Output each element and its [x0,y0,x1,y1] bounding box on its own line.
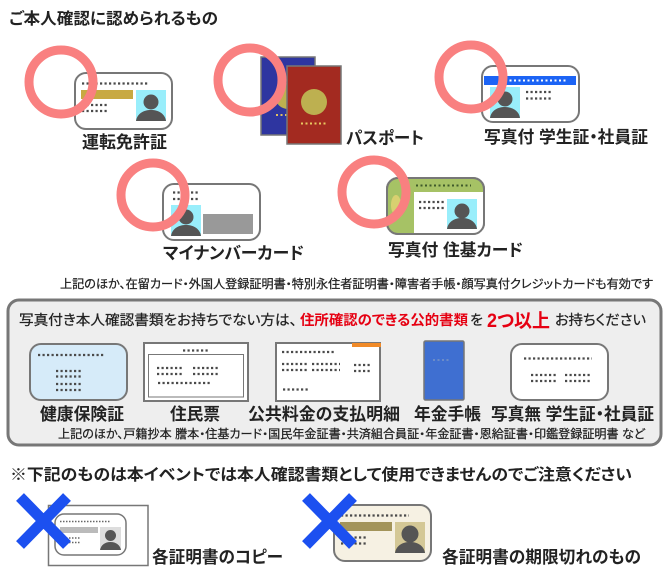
icon: utility bill [276,343,381,401]
panel: address documents [8,300,661,445]
warning heading: ※下記のものは本イベントでは本人確認書類として使用できませんのでご注意ください [10,465,632,484]
panel heading: red emphasis: 住所確認のできる公的書類 [300,312,468,328]
icon: Juki card with photo [342,160,484,234]
icon: passports [218,48,341,144]
icon: student / employee ID with photo [439,45,579,122]
label: health insurance card: 健康保険証 [40,405,124,424]
label: student / employee ID without photo: 写真無 学生証・社員証 [491,404,654,424]
icon: health insurance card [30,344,127,400]
label: resident record: 住民票 [170,405,220,424]
icon: pension book [424,341,464,400]
label: expired ID: 各証明書の期限切れのもの [442,547,641,567]
label: photocopy: 各証明書のコピー [152,547,283,567]
label: My Number card: マイナンバーカード [163,244,304,263]
panel heading: 写真付き本人確認書類をお持ちでない方は、 [19,312,297,328]
label: utility bill: 公共料金の支払明細 [248,404,400,424]
panel heading: please bring: お持ちください [555,312,646,328]
label: passport: パスポート [346,128,424,148]
label: student / employee ID with photo: 写真付 学生証・社員証 [484,127,648,147]
icon: resident record [144,343,248,401]
panel heading: particle: を [470,312,483,328]
icon: student / employee ID without photo [511,344,608,400]
label: Juki card with photo: 写真付 住基カード [388,241,523,260]
note: other accepted IDs: 上記のほか、在留カード・外国人登録証明書・特別永住者証明書・障害者手帳・顔写真付クレジットカードも有効です [60,276,653,291]
title: ご本人確認に認められるもの [9,9,218,28]
icon: driver's licence [29,50,172,129]
icon: My Number card [121,163,260,240]
note: other address documents: 上記のほか、戸籍抄本 謄本・住基カード・国民年金証書・共済組合員証・年金証書・恩給証書・印鑑登録証明書 など [58,426,646,441]
label: pension book: 年金手帳 [414,404,481,424]
panel heading: two or more: 2つ以上 [487,310,550,332]
icon: photocopy not accepted [20,497,148,566]
label: driver's licence: 運転免許証 [82,132,167,152]
icon: expired ID not accepted [306,497,431,561]
